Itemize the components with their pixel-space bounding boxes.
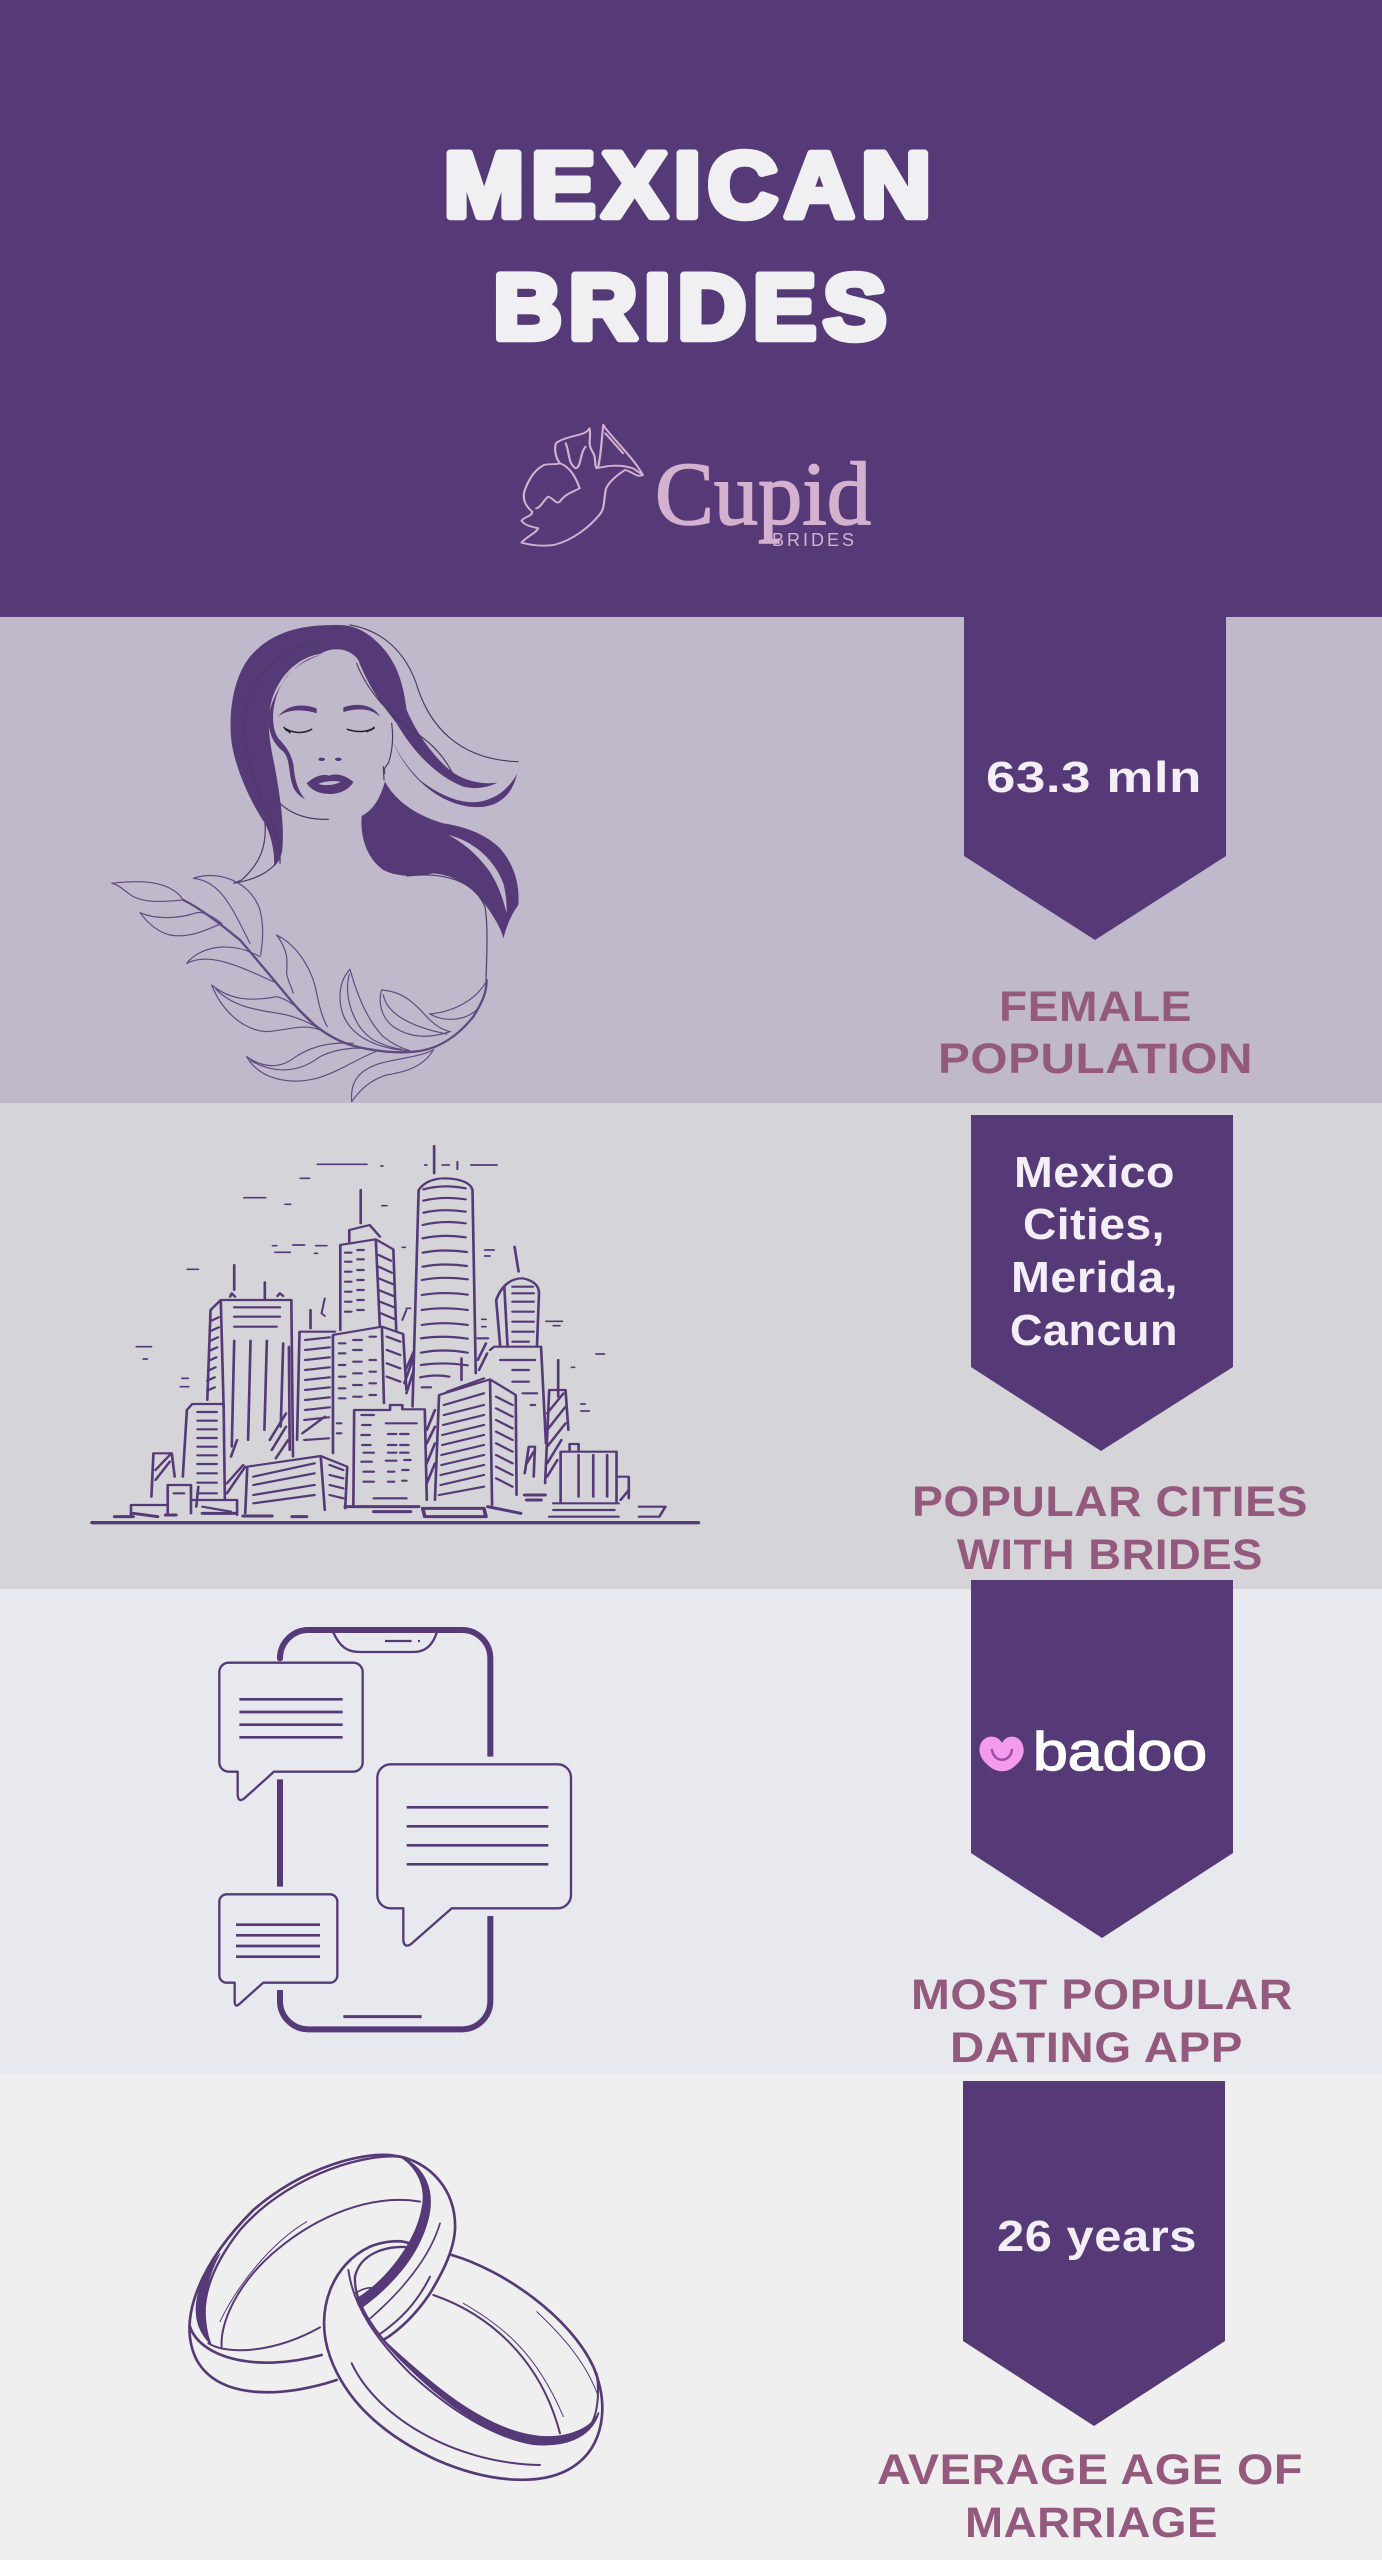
label: average age of marriage [877, 2446, 1303, 2547]
mid left building [297, 1310, 335, 1440]
ribbon: 63.3 mln [964, 617, 1226, 940]
label: average age of marriage: MARRIAGE [965, 2499, 1218, 2547]
panel: dating app [0, 1478, 1382, 2074]
illustration: phone with chat bubbles [219, 1630, 571, 2029]
front tick building [353, 1405, 435, 1505]
base clutter [115, 1495, 545, 1517]
illustration: woman with leaves [112, 625, 519, 1102]
chat bubble: bottom left [219, 1894, 337, 2006]
front striped building [435, 1378, 517, 1505]
chat bubble: top left [219, 1663, 363, 1800]
logo: Cupid Brides [522, 425, 871, 550]
label: most popular dating app: MOST POPULAR [911, 1971, 1293, 2019]
label: average age of marriage: AVERAGE AGE OF [877, 2446, 1303, 2494]
chat bubble: right [377, 1764, 571, 1946]
ribbon: cities [971, 1115, 1233, 1451]
hair [231, 625, 519, 938]
icon: cherub [522, 425, 643, 546]
right towers [490, 1247, 568, 1483]
label: most popular dating app: DATING APP [950, 2024, 1243, 2072]
central stepped tower [333, 1190, 414, 1453]
label: popular cities with brides: WITH BRIDES [957, 1531, 1263, 1579]
logo wordmark: Cupid [655, 445, 871, 544]
left ring [190, 2155, 455, 2392]
label: most popular dating app [911, 1971, 1293, 2072]
sky dashes [136, 1162, 604, 1411]
label: female population [938, 983, 1253, 1083]
label: popular cities with brides: POPULAR CITIES [912, 1478, 1308, 1526]
label: female population: FEMALE [999, 983, 1192, 1031]
logo wordmark: BRIDES [772, 530, 854, 550]
ribbon: badoo: badoo [1033, 1722, 1207, 1782]
right ring [324, 2241, 602, 2480]
panel: marriage age [0, 2074, 1382, 2560]
ribbon: 63.3 mln: 63.3 mln [986, 753, 1202, 802]
illustration: wedding rings [190, 2155, 602, 2480]
title: BRIDES [494, 256, 894, 358]
right low building [549, 1444, 665, 1517]
tall round tower [413, 1146, 488, 1407]
ribbon: cities: Cities, [1023, 1200, 1165, 1249]
ribbon: 26 years: 26 years [997, 2212, 1197, 2261]
icon: badoo heart [979, 1737, 1024, 1771]
left small building [131, 1404, 245, 1515]
ribbon: cities: Cancun [1010, 1306, 1178, 1355]
phone [280, 1630, 490, 2029]
illustration: city skyline [92, 1146, 698, 1523]
label: female population: POPULATION [938, 1035, 1253, 1083]
leaves [112, 876, 487, 1102]
panel: header [0, 0, 1382, 617]
title: MEXICAN [444, 134, 938, 236]
panel: popular cities [0, 1103, 1382, 1589]
ribbon: 26 years [963, 2081, 1225, 2426]
ground line [92, 1518, 698, 1528]
panel: female population [0, 617, 1382, 1103]
left tall building [207, 1265, 293, 1458]
ribbon: cities: Mexico [1014, 1148, 1175, 1197]
ribbon: badoo [971, 1580, 1233, 1938]
title [444, 134, 938, 358]
label: popular cities with brides [912, 1478, 1308, 1579]
ribbon: cities: Merida, [1011, 1253, 1178, 1302]
wide low building [245, 1456, 347, 1513]
line work [233, 625, 518, 980]
hair cut-outs [318, 781, 507, 913]
